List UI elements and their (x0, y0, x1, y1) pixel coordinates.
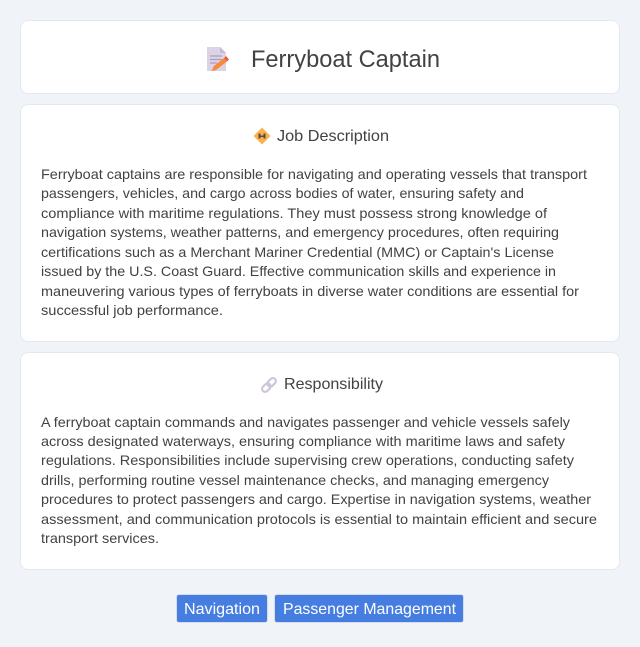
text block: job description: issued by the U.S. Coast Guard. Effective communication skills and experience in (41, 263, 556, 279)
icon: chain link (261, 377, 277, 393)
text block: job description: Ferryboat captains are responsible for navigating and operating vessels that transport (41, 166, 587, 182)
text block: responsibility: transport services. (41, 530, 159, 546)
tag: passenger management (274, 594, 464, 623)
heading: job description: Job Description (277, 128, 389, 145)
text block: job description (41, 166, 587, 318)
tag: navigation (176, 594, 268, 623)
text block: responsibility (41, 414, 597, 546)
tag: navigation: Navigation (184, 601, 260, 618)
text block: job description: successful job performance. (41, 302, 223, 318)
panel: responsibility (20, 352, 620, 570)
tag: passenger management: Passenger Management (283, 601, 457, 618)
text block: responsibility: A ferryboat captain commands and navigates passenger and vehicle vessels safely (41, 414, 570, 430)
text block: responsibility: across designated waterways, ensuring compliance with maritime laws and safety (41, 433, 565, 449)
text block: responsibility: regulations. Responsibilities include supervising crew operations, conducting safety (41, 452, 574, 468)
icon: diamond road sign (254, 128, 270, 144)
heading: responsibility: Responsibility (284, 376, 383, 393)
text block: responsibility: assessment, and communication protocols is essential to maintain efficient and secure (41, 511, 597, 527)
panel: job description (20, 104, 620, 342)
text block: responsibility: drills, performing routine vessel maintenance checks, and managing emergency (41, 472, 549, 488)
text block: job description: compliance with maritime regulations. They must possess strong knowledge of (41, 205, 547, 221)
icon: document with pencil (207, 47, 229, 71)
text block: job description: certifications such as a Merchant Mariner Credential (MMC) or Captain's License (41, 244, 554, 260)
text block: job description: passengers, vehicles, and cargo across bodies of water, ensuring safety and (41, 185, 524, 201)
text block: job description: navigation systems, weather patterns, and emergency procedures, often requiring (41, 224, 559, 240)
text block: responsibility: procedures to protect passengers and cargo. Expertise in navigation systems, weather (41, 491, 591, 507)
panel: title card (20, 20, 620, 94)
title: Ferryboat Captain (251, 46, 440, 73)
text block: job description: maneuvering various types of ferryboats in diverse water conditions are essential for (41, 283, 579, 299)
